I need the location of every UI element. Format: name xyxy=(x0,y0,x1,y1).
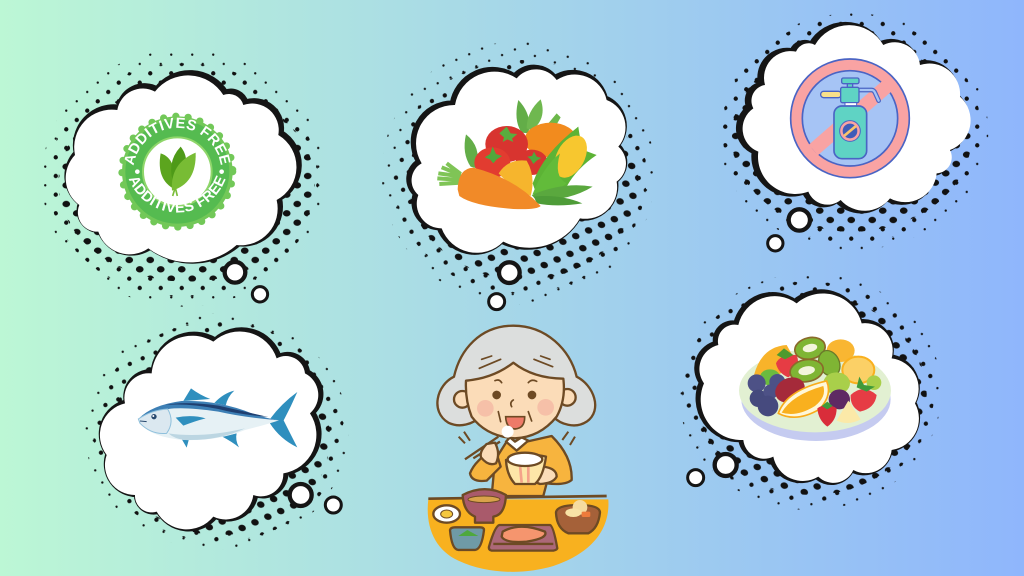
cloud outline xyxy=(697,292,917,482)
cloud outline xyxy=(739,25,967,210)
halftone dots xyxy=(718,13,988,250)
table edge xyxy=(428,496,607,499)
halftone dots xyxy=(678,273,942,510)
bubble large xyxy=(225,262,245,283)
bubble large xyxy=(290,484,312,506)
bubble small xyxy=(768,236,783,251)
body xyxy=(465,436,572,496)
cloud fill xyxy=(412,69,626,253)
table xyxy=(428,499,608,572)
thought bubble: no pesticides xyxy=(718,13,988,251)
grilled fish plate xyxy=(489,525,557,551)
vegetable dish xyxy=(450,527,484,550)
ear right xyxy=(559,389,576,406)
bubble small xyxy=(325,497,341,513)
cloud fill xyxy=(699,293,919,483)
badge text bottom: ADDITIVES FREE xyxy=(128,175,226,213)
halftone dots xyxy=(85,313,348,550)
soup bowl xyxy=(463,489,506,523)
bubble small xyxy=(688,470,704,486)
icon: tuna fish xyxy=(138,388,297,448)
thought bubble: vegetables xyxy=(382,42,655,310)
icon: additives free badge xyxy=(118,112,236,231)
facial features xyxy=(459,356,575,445)
bubble large xyxy=(499,262,520,283)
pickle dish xyxy=(433,505,460,523)
cloud outline xyxy=(410,68,624,251)
cloud fill xyxy=(743,25,971,211)
cloud fill xyxy=(100,331,318,529)
bubble small xyxy=(252,287,268,302)
thought bubble: additives free xyxy=(44,53,320,307)
simmered dish bowl xyxy=(556,500,600,533)
rice bowl and hand xyxy=(506,453,557,484)
hair xyxy=(437,326,595,425)
halftone dots xyxy=(42,50,325,307)
bubble large xyxy=(715,454,737,476)
bubble small xyxy=(489,294,505,310)
halftone dots xyxy=(382,42,655,305)
thought bubble: tuna xyxy=(85,313,348,550)
badge text top: ADDITIVES FREE xyxy=(124,118,231,166)
cloud fill xyxy=(66,75,296,262)
grandmother eating at table xyxy=(428,326,608,572)
cloud outline xyxy=(102,330,320,528)
icon: crossed-out spray bottle xyxy=(791,59,909,178)
icon: fruit plate xyxy=(739,335,891,441)
icon: vegetables xyxy=(437,99,597,209)
cloud outline xyxy=(68,73,298,260)
face xyxy=(466,363,564,438)
bubble large xyxy=(789,209,810,231)
ear left xyxy=(454,391,471,408)
thought bubble: fruit xyxy=(678,273,942,510)
